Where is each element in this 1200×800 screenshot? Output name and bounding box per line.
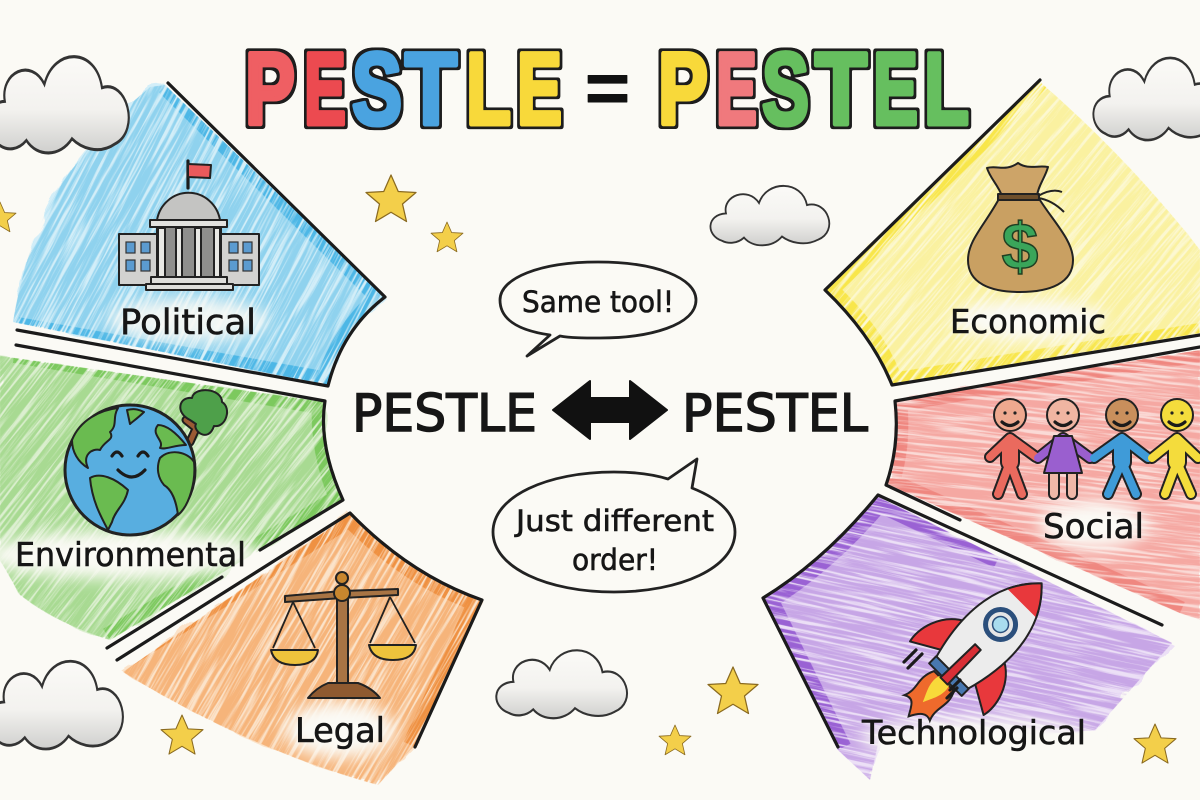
label: Legal: Legal: [295, 711, 385, 751]
label: Political: Political: [120, 303, 256, 343]
cloud: top right: [1093, 58, 1200, 140]
icon: rocket: [901, 582, 1043, 724]
panel: Economic: [823, 78, 1200, 387]
callout: Same tool!: [500, 262, 696, 356]
dollar sign: $: [1002, 209, 1038, 283]
callout: Just different order!: [493, 459, 735, 592]
title: PESTLE = PESTEL: S: [352, 32, 402, 146]
title: PESTLE = PESTEL: E: [873, 32, 918, 146]
panel: Environmental: [0, 343, 345, 650]
label: Environmental: Environmental: [15, 535, 246, 574]
title: PESTLE = PESTEL: L: [466, 32, 511, 146]
centre label: PESTEL: PESTEL: [682, 384, 868, 444]
title: PESTLE = PESTEL: E: [716, 32, 757, 146]
cloud: centre top: [710, 186, 829, 245]
panel: Technological: [761, 493, 1175, 780]
title: PESTLE = PESTEL: =: [585, 49, 630, 127]
stars: [0, 175, 1176, 763]
label: Technological: Technological: [861, 713, 1086, 752]
panel: Political: [13, 81, 387, 388]
label: Economic: Economic: [950, 302, 1106, 341]
title: PESTLE = PESTEL: P: [245, 32, 295, 146]
icon: money bag: [968, 163, 1073, 292]
panel: Legal: [115, 510, 484, 785]
callout: Just different order!: order!: [572, 543, 658, 577]
icon: capitol building: [119, 161, 259, 290]
cloud: top left: [0, 57, 129, 153]
title: PESTLE = PESTEL: T: [405, 32, 457, 146]
callout: Just different order!: Just different: [514, 504, 714, 538]
cloud: bottom left: [0, 661, 123, 749]
icon: people holding hands: [990, 399, 1198, 494]
title: PESTLE = PESTEL: T: [815, 32, 867, 146]
icon: scales of justice: [271, 572, 416, 698]
label: Social: Social: [1043, 507, 1144, 547]
centre label: PESTLE: PESTLE: [352, 384, 537, 444]
double-headed arrow: [553, 381, 667, 439]
panel: Social: [884, 345, 1200, 620]
icon: globe with tree: [65, 390, 227, 535]
title: PESTLE = PESTEL: [245, 32, 969, 146]
title: PESTLE = PESTEL: E: [304, 32, 346, 146]
title: PESTLE = PESTEL: L: [924, 32, 969, 146]
cloud: bottom centre: [496, 650, 627, 718]
title: PESTLE = PESTEL: E: [517, 32, 562, 146]
title: PESTLE = PESTEL: S: [762, 32, 809, 146]
title: PESTLE = PESTEL: P: [658, 32, 708, 146]
callout: Same tool!: Same tool!: [522, 285, 674, 319]
